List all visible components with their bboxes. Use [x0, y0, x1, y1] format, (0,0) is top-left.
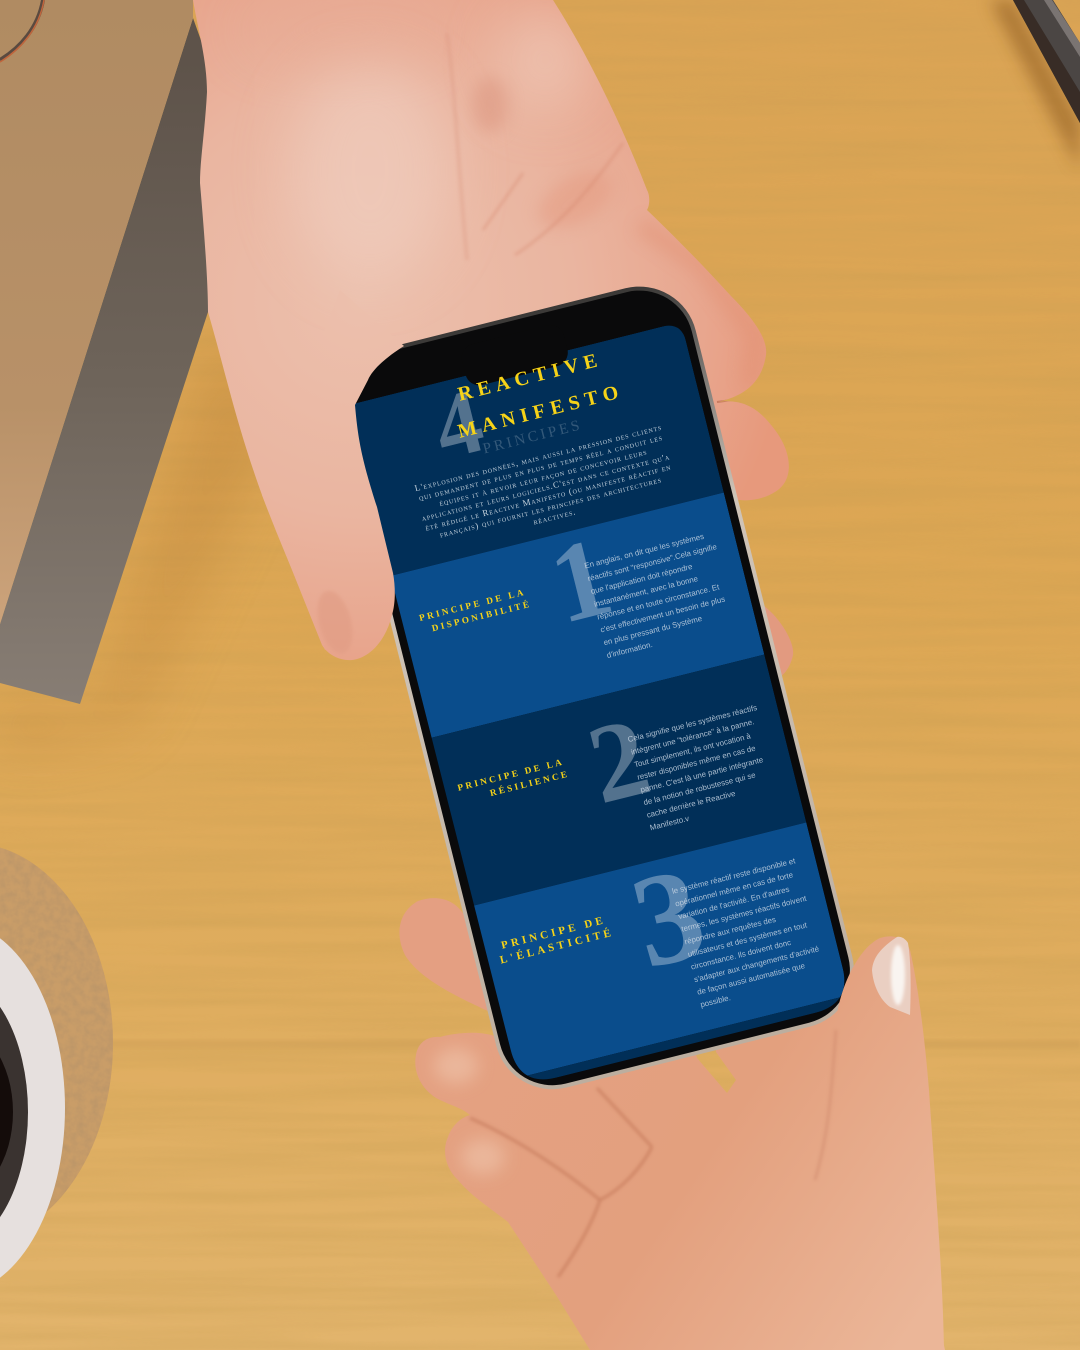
- lower hand thumb: [760, 936, 944, 1350]
- section 2 background: [431, 655, 806, 906]
- phone metal frame: [326, 274, 866, 1102]
- palm highlights: [290, 60, 450, 280]
- title line 2: MANIFESTO: [455, 380, 626, 443]
- subtitle: PRINCIPES: [481, 417, 584, 457]
- notebook shadow on desk: [0, 320, 280, 750]
- description: de la notion de robustesse qui se: [643, 770, 757, 807]
- intro paragraph: qui demandent de plus en plus de temps réel a conduit les: [418, 432, 664, 503]
- upper hand behind phone: [193, 0, 793, 682]
- intro paragraph: réactives.: [532, 506, 577, 527]
- description: d'information.: [606, 640, 653, 660]
- lower hand behind phone: [399, 898, 945, 1350]
- description: panne. C'est là une partie intégrante: [639, 755, 765, 794]
- coffee mug: [0, 922, 65, 1294]
- description: c'est effectivement un besoin de plus: [599, 595, 726, 634]
- thumbnail highlight: [891, 945, 905, 1005]
- section 1: disponibilité: [405, 486, 739, 702]
- heading: L'ÉLASTICITÉ: [499, 927, 615, 967]
- description: Cela signifie que les systèmes réactifs: [627, 703, 758, 744]
- description: intègrent une "tolérance" à la panne.: [630, 717, 755, 757]
- section 1 background: [390, 493, 764, 738]
- phone screen: [347, 322, 852, 1090]
- section 2: résilience: [446, 665, 782, 875]
- description: En anglais, on dit que les systèmes: [583, 532, 705, 570]
- header section background: [347, 322, 724, 576]
- description: circonstance. Ils doivent donc: [690, 938, 792, 972]
- heading: PRINCIPE DE LA: [456, 757, 565, 793]
- description: en plus pressant du Système: [603, 614, 704, 647]
- description: Tout simplement, ils ont vocation à: [633, 731, 752, 769]
- glasses wire: [0, 0, 44, 62]
- description: répondre aux requêtes des: [684, 915, 777, 946]
- description: cache derrière le Reactive: [646, 789, 737, 820]
- notebook spine: [0, 18, 208, 704]
- thumb palm crease: [815, 1030, 836, 1180]
- numeral 3: 3: [618, 838, 718, 997]
- finger near lower right edge: [750, 600, 793, 682]
- description: termes, les systèmes réactifs doivent: [680, 894, 808, 934]
- description: de façon aussi automatisée que: [696, 961, 806, 997]
- notebook: [0, 0, 208, 704]
- finger fold creases: [470, 1088, 652, 1277]
- fingertip highlights: [434, 1048, 478, 1084]
- description: réactifs sont "responsive".Cela signifie: [587, 542, 718, 583]
- intro paragraph: été rédigé le Reactive Manifesto (ou manifeste réactif en: [424, 462, 672, 533]
- intro paragraph: L'explosion des données, mais aussi la pression des clients: [414, 422, 663, 493]
- intro paragraph: applications et leurs logiciels.C'est dans ce contexte qu'a: [420, 451, 671, 523]
- description: variation de l'activité. En d'autres: [677, 885, 790, 921]
- intro paragraph: équipes it à revoir leur façon de concevoir leurs: [438, 446, 648, 508]
- cork coaster: [0, 843, 113, 1243]
- description: instantanément, avec la bonne: [593, 574, 699, 609]
- numeral 4: 4: [424, 369, 493, 479]
- description: possible.: [699, 993, 732, 1009]
- heading: DISPONIBILITÉ: [431, 599, 532, 633]
- upper hand thumb over phone: [262, 290, 404, 660]
- phone black bezel: [330, 279, 861, 1097]
- description: s'adapter aux changements d'activité: [693, 944, 821, 984]
- back finger: [399, 898, 520, 1030]
- section 3 background: [473, 822, 850, 1078]
- numeral 2: 2: [577, 694, 661, 828]
- palm and fingers: [415, 1000, 945, 1350]
- hand shading: [290, 4, 741, 403]
- description: opérationnel même en cas de forte: [674, 870, 795, 908]
- title line 1: REACTIVE: [456, 348, 604, 406]
- heading: RÉSILIENCE: [489, 769, 570, 798]
- numeral 1: 1: [539, 514, 623, 648]
- heading: PRINCIPE DE: [500, 914, 607, 952]
- pen in top right corner: [1013, 0, 1080, 123]
- description: rester disponibles même en cas de: [636, 743, 757, 782]
- description: utilisateurs et des systèmes en tout: [687, 920, 809, 959]
- camera notch: [459, 322, 571, 388]
- smartphone: [355, 286, 854, 1090]
- notebook cover: [0, 0, 193, 624]
- description: Manifesto.v: [649, 814, 690, 832]
- description: le système réactif reste disponible et: [671, 856, 797, 896]
- intro paragraph: français) qui fournit les principes des architectures: [439, 474, 663, 540]
- thumbnail shading: [311, 587, 359, 657]
- pen shadow on desk: [990, 0, 1080, 170]
- description: réponse et en toute circonstance. Et: [596, 582, 721, 622]
- thumbnail: [872, 937, 911, 1015]
- bottom strip: [528, 998, 840, 1080]
- heading: PRINCIPE DE LA: [418, 587, 526, 623]
- section 3: élasticité: [482, 812, 828, 1054]
- description: que l'application doit répondre: [590, 562, 694, 596]
